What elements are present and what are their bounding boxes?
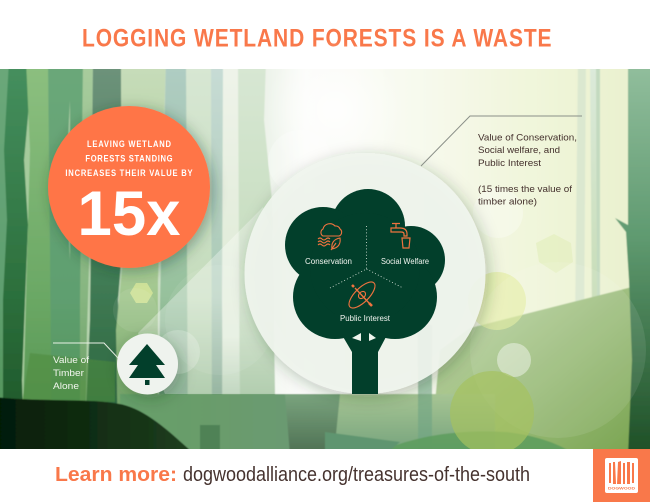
callout: conservation value — [421, 116, 582, 208]
tree crown and trunk — [285, 189, 445, 394]
tree diagram — [285, 189, 445, 394]
footer — [0, 449, 650, 502]
orange callout circle: FORESTS STANDING — [85, 153, 173, 164]
icon: kayak and paddle — [345, 278, 379, 312]
callout: conservation value: Value of Conservation, — [478, 132, 577, 144]
large magnified circle — [244, 153, 486, 394]
callout: timber value: Value of — [53, 355, 89, 366]
white notches — [352, 333, 361, 341]
title: LOGGING WETLAND FORESTS IS A WASTE — [82, 24, 552, 52]
orange callout circle: INCREASES THEIR VALUE BY — [65, 167, 193, 178]
forest background — [0, 60, 650, 455]
dotted dividers — [330, 226, 403, 288]
label: conservation: Conservation — [305, 257, 352, 266]
callout: timber value — [53, 343, 118, 392]
hill middle — [335, 394, 455, 449]
orange callout circle: 15x — [78, 179, 180, 249]
projection cone from small circle to large circle — [138, 207, 365, 394]
icon: faucet and cup — [391, 224, 410, 248]
callout: conservation value: Public Interest — [478, 158, 541, 169]
callout: conservation value: Social welfare, and — [478, 145, 560, 156]
orange callout circle: LEAVING WETLAND — [87, 138, 171, 149]
label: public interest: Public Interest — [340, 314, 391, 323]
callout: conservation value: timber alone) — [478, 196, 537, 208]
left lower ground band — [120, 394, 290, 454]
learn more link text: dogwoodalliance.org/treasures-of-the-south — [183, 464, 530, 486]
callout: timber value: Timber — [53, 368, 84, 379]
callout: timber value: Alone — [53, 381, 79, 392]
icon: pine tree — [129, 344, 165, 385]
icon: cloud, waves and leaf — [318, 224, 342, 250]
hill right — [430, 287, 632, 455]
logo: Dogwood Alliance — [593, 449, 650, 502]
learn more link text: Learn more: — [55, 464, 177, 486]
light bokeh circles — [113, 40, 646, 455]
dark foreground hill — [0, 397, 190, 449]
small timber circle with pine icon — [117, 334, 178, 394]
bottom right hill — [392, 432, 566, 449]
logo: Dogwood Alliance: DOGWOOD — [608, 486, 635, 490]
label: social welfare: Social Welfare — [381, 257, 430, 266]
callout: conservation value: (15 times the value of — [478, 184, 572, 195]
orange callout circle — [48, 106, 210, 268]
right trunk — [615, 60, 650, 455]
